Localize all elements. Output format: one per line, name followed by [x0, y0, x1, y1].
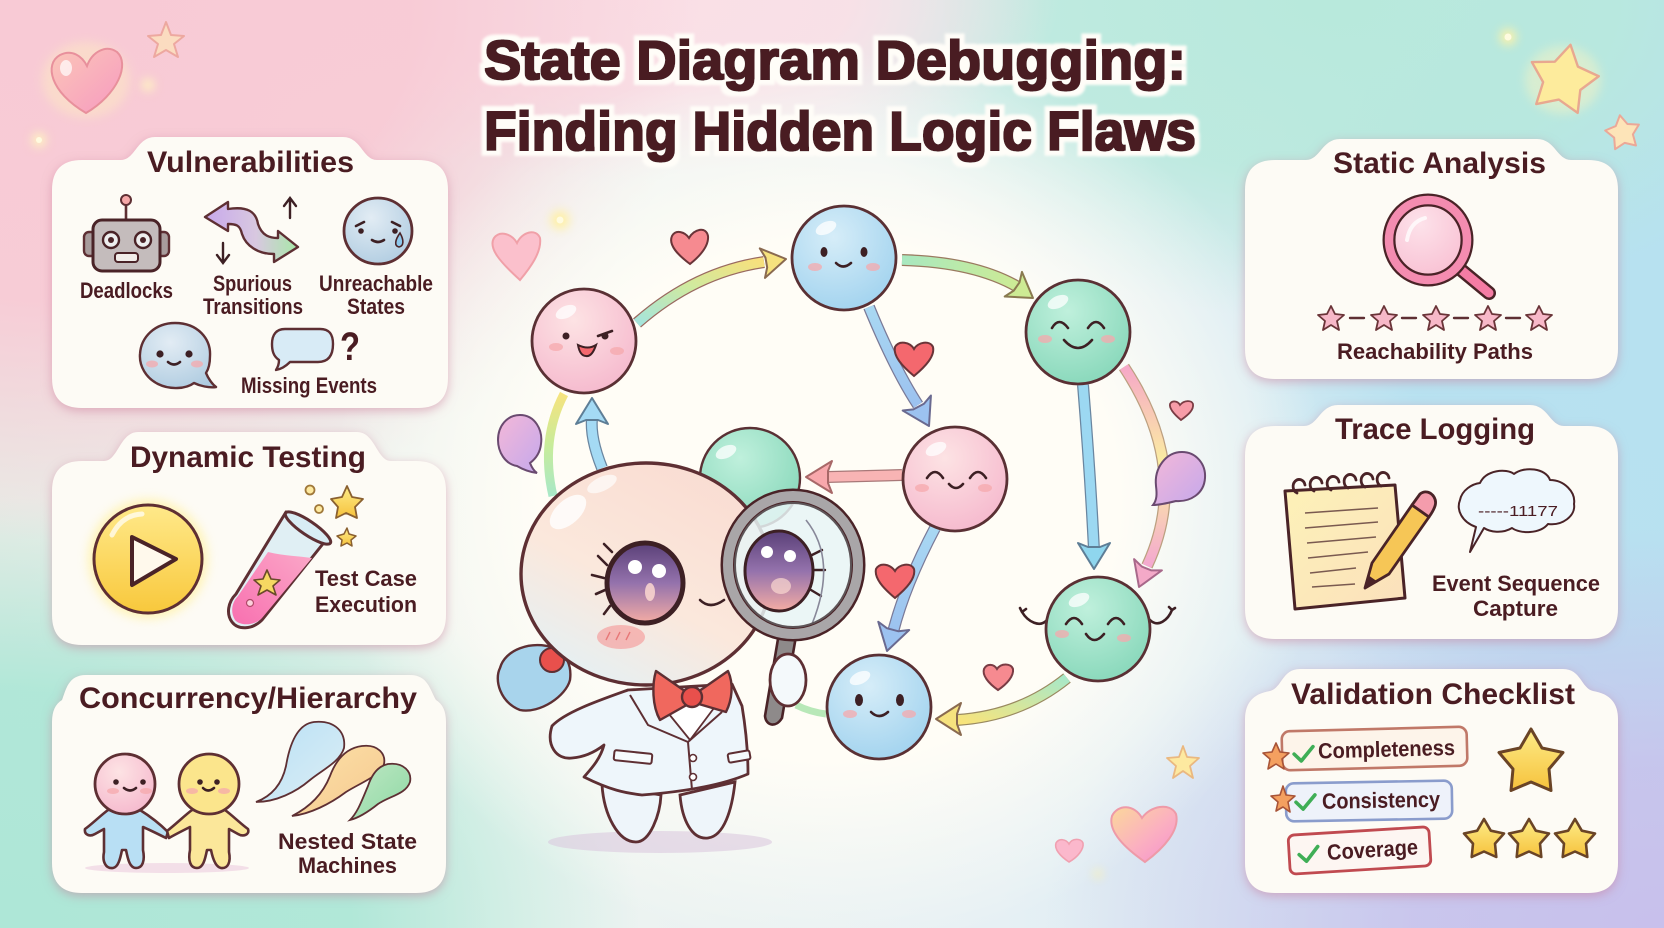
icon: pink magnifying glass: [1389, 200, 1489, 293]
panel: vulnerabilities: [52, 137, 448, 408]
arrow: middle pink state to lower blue state: [872, 528, 935, 655]
icon: event sequence thought cloud: -----11177: [1478, 503, 1558, 520]
state node: lower blue: [827, 655, 931, 759]
panel: static analysis: [1245, 139, 1618, 379]
heading: concurrency/hierarchy: Concurrency/Hierarchy: [79, 682, 417, 715]
icon: speech bubble with question mark: ?: [340, 325, 360, 369]
icon: orange stars by checklist: [1263, 743, 1295, 812]
label: nested state machines: Nested State: [278, 829, 417, 854]
state diagram: [492, 206, 1205, 878]
heading: validation checklist: Validation Checklist: [1291, 678, 1575, 711]
icon: three gold stars: [1464, 819, 1595, 857]
arrow: rainbow tail to pink state: [548, 394, 564, 496]
label: spurious transitions: Spurious: [213, 271, 292, 296]
label: test case execution: Execution: [315, 592, 417, 617]
label: nested state machines: [278, 829, 417, 878]
mascot shadow: [548, 831, 772, 853]
label: event sequence capture: Capture: [1473, 596, 1558, 621]
icon: play button: [88, 499, 208, 619]
label: unreachable states: [319, 271, 433, 319]
icon: deadlock robot: [84, 195, 169, 271]
mascot left eye: [592, 543, 683, 623]
checklist item: coverage: Coverage: [1326, 834, 1419, 865]
title: Finding Hidden Logic Flaws: [484, 100, 1196, 162]
state node: right green: [1026, 280, 1130, 384]
panel: trace logging: [1245, 405, 1618, 639]
heading: static analysis: Static Analysis: [1333, 147, 1546, 180]
label: missing events: Missing Events: [241, 373, 377, 398]
label: deadlocks: Deadlocks: [80, 278, 173, 303]
label: event sequence capture: [1432, 571, 1600, 621]
label: spurious transitions: Transitions: [203, 294, 303, 319]
checklist item: coverage: [1288, 827, 1431, 874]
arrow: right green state rainbow curve: [1124, 367, 1165, 593]
mascot head: [521, 463, 771, 685]
icon: test tube with stars: [229, 486, 363, 628]
icon: sad unreachable state: [344, 198, 412, 264]
heading: vulnerabilities: Vulnerabilities: [147, 146, 354, 179]
icon: ghost bubble: [140, 323, 216, 388]
decoration: top-left heart and star: [32, 22, 184, 147]
label: unreachable states: States: [347, 294, 405, 319]
checklist item: completeness: [1282, 727, 1467, 770]
title: State Diagram Debugging:: [484, 29, 1186, 91]
decoration: hearts and bubbles around diagram: [492, 211, 1205, 878]
icon: event sequence thought cloud: [1459, 469, 1574, 552]
state node: lower green with arms: [1020, 577, 1175, 681]
panel: dynamic testing: [52, 432, 446, 645]
state node: green partly hidden: [700, 428, 800, 528]
arrow: lower green state to lower blue state: [936, 678, 1067, 735]
label: test case execution: Test Case: [315, 566, 417, 591]
state node: middle pink: [903, 427, 1007, 531]
panel: validation checklist: [1245, 669, 1618, 893]
checklist item: consistency: Consistency: [1322, 787, 1441, 814]
state node: top blue: [792, 206, 896, 310]
arrow: hidden green segment: [796, 705, 826, 714]
heading: trace logging: Trace Logging: [1335, 413, 1535, 446]
arrow: top blue state to middle pink state: [869, 307, 943, 434]
mascot red bow tie: [653, 671, 732, 720]
decoration: top-right stars: [1500, 29, 1642, 150]
label: nested state machines: Machines: [298, 853, 397, 878]
mascot magnifying glass: [727, 495, 859, 725]
arrow: pink state to top blue state: [637, 244, 789, 323]
label: spurious transitions: [203, 271, 303, 319]
mascot legs: [602, 782, 735, 842]
title: [484, 29, 1196, 162]
label: test case execution: [315, 566, 417, 617]
checklist item: consistency: [1286, 781, 1452, 821]
icon: speech bubble with question mark: [272, 325, 360, 370]
arrow: right green state straight down: [1078, 385, 1110, 569]
label: unreachable states: Unreachable: [319, 271, 433, 296]
icon: spurious transitions arrow: [205, 198, 298, 263]
arrow: blue upward to pink state: [576, 398, 608, 468]
icon: reachability path stars: [1318, 306, 1552, 330]
icon: large gold star: [1499, 729, 1563, 790]
arrow: middle pink state leftward: [806, 461, 902, 493]
arrow: top blue state to right green state: [902, 260, 1042, 310]
heading: dynamic testing: Dynamic Testing: [130, 441, 366, 474]
checklist item: completeness: Completeness: [1318, 735, 1455, 763]
icon: two people holding hands: [85, 754, 249, 873]
panel: concurrency and hierarchy: [52, 675, 446, 893]
mascot lab coat: [550, 684, 751, 795]
state node: pink skeptical: [532, 289, 636, 393]
icon: notepad and pencil: [1285, 472, 1436, 609]
mascot: detective with magnifying glass: [498, 463, 859, 853]
label: event sequence capture: Event Sequence: [1432, 571, 1600, 596]
mascot hair tuft: [498, 645, 570, 711]
icon: nested state bubbles: [256, 722, 410, 820]
mascot hand: [770, 654, 806, 706]
label: reachability paths: Reachability Paths: [1337, 339, 1533, 364]
